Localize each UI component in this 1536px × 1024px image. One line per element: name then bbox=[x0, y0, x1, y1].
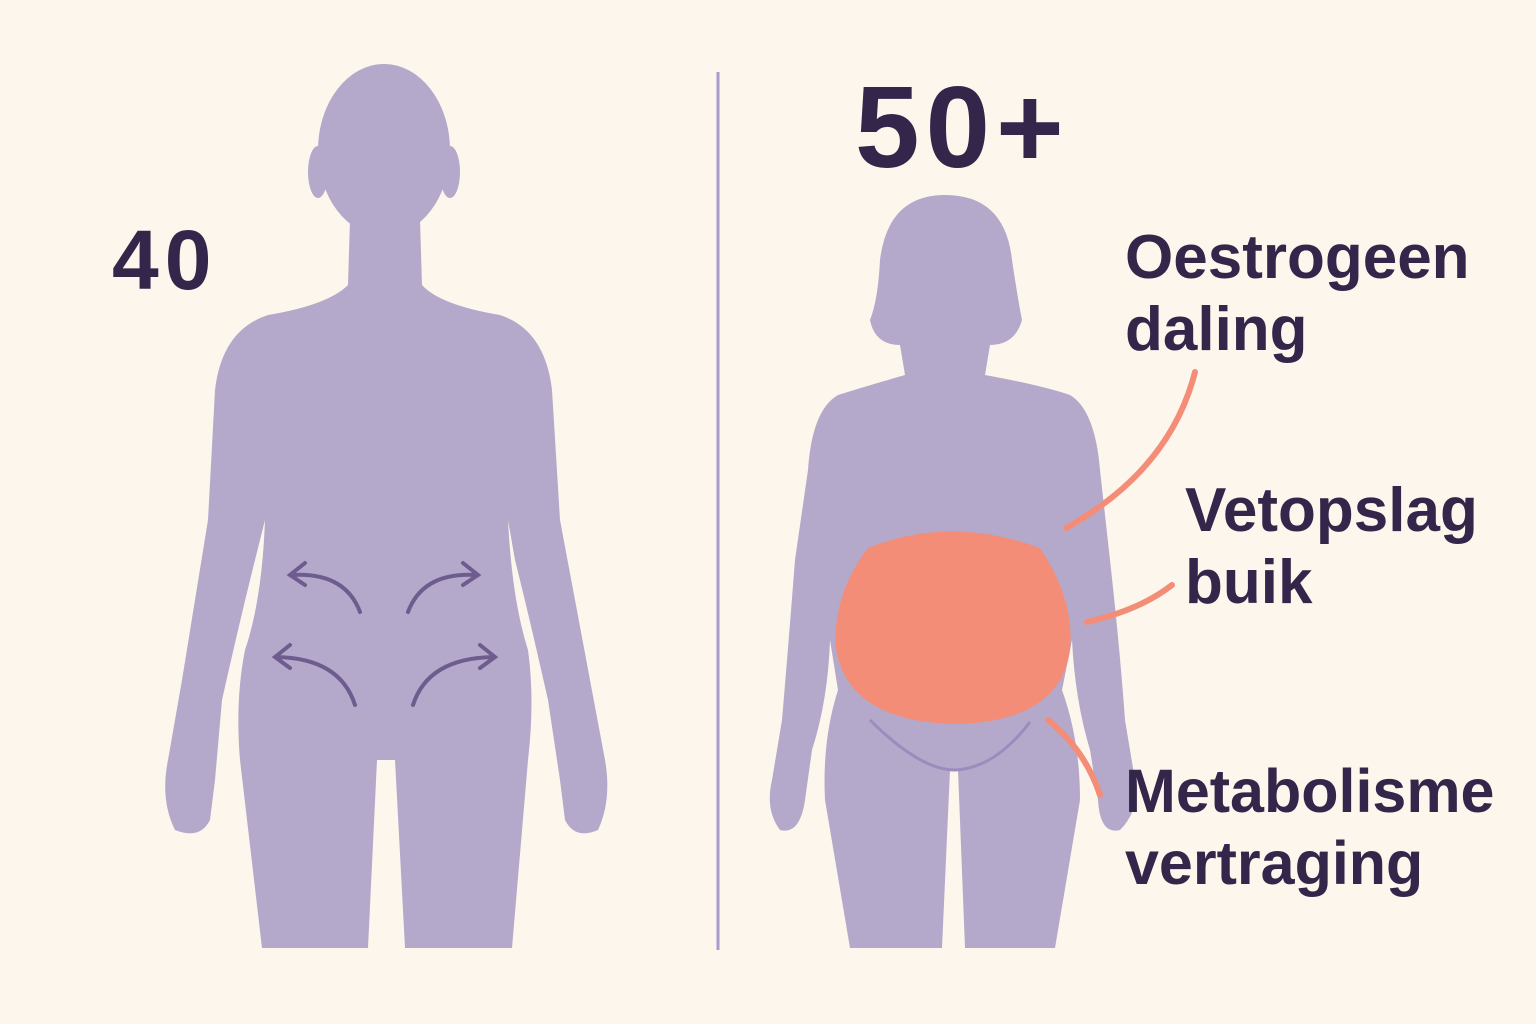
figure: 40 year old body bbox=[165, 64, 607, 948]
label: Oestrogeen daling: Oestrogeen bbox=[1125, 223, 1470, 292]
pointer lines bbox=[1048, 372, 1195, 795]
label: Vetopslag buik: buik bbox=[1185, 548, 1312, 617]
belly fat area bbox=[836, 532, 1071, 724]
label: Metabolisme vertraging bbox=[1125, 757, 1494, 897]
figure: 50+ body bbox=[770, 195, 1136, 948]
label: 40: 40 bbox=[112, 213, 217, 307]
label: Metabolisme vertraging: vertraging bbox=[1125, 829, 1423, 897]
label: 50+: 50+ bbox=[855, 62, 1070, 192]
label: Oestrogeen daling bbox=[1125, 223, 1470, 364]
curved arrows on hips bbox=[275, 563, 495, 705]
label: Oestrogeen daling: daling bbox=[1125, 295, 1308, 364]
label: Vetopslag buik bbox=[1185, 476, 1478, 617]
label: Metabolisme vertraging: Metabolisme bbox=[1125, 757, 1494, 825]
divider line bbox=[716, 72, 720, 950]
label: Vetopslag buik: Vetopslag bbox=[1185, 476, 1478, 545]
